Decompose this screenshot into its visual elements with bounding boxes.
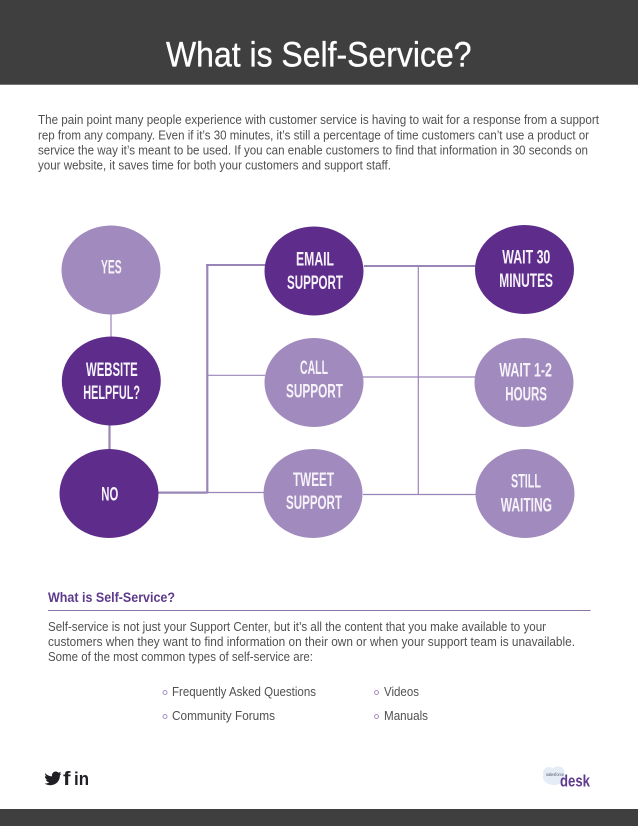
logo: salesforce desk: desk: [560, 772, 590, 790]
icon: facebook f: f: [63, 769, 71, 790]
intro paragraph: your website, it saves time for both your customers and support staff.: [38, 158, 391, 172]
footer bar: [0, 809, 638, 826]
node: website helpful: HELPFUL?: [83, 383, 140, 404]
node: yes: [62, 226, 160, 314]
node: email support: SUPPORT: [287, 273, 343, 294]
list: self-service types: Frequently Asked Questions: [172, 685, 316, 699]
title: What is Self-Service?: [166, 36, 472, 75]
logo: salesforce desk: [543, 766, 590, 790]
logo: salesforce desk: salesforce: [546, 772, 564, 777]
section paragraph: Self-service is not just your Support Center, but it’s all the content that you make available to your: [48, 620, 546, 634]
node: wait 30 minutes: WAIT 30: [502, 248, 550, 268]
node: wait 1-2 hours: HOURS: [505, 384, 547, 406]
node: tweet support: [264, 449, 362, 538]
node: call support: [264, 338, 364, 427]
node: website helpful: [62, 336, 161, 426]
node: wait 1-2 hours: WAIT 1-2: [499, 360, 552, 382]
node: wait 30 minutes: [475, 225, 574, 314]
intro paragraph: service the way it’s meant to be used. If you can enable customers to find that information in 30 seconds on: [38, 144, 588, 158]
node: no: [60, 449, 158, 538]
connector lines: [110, 264, 476, 494]
list: self-service types: [163, 685, 428, 723]
intro paragraph: [38, 113, 599, 172]
section heading: What is Self-Service?: [48, 589, 175, 605]
node: still waiting: [476, 449, 574, 538]
node: website helpful: WEBSITE: [86, 360, 138, 381]
icon: linkedin: in: [74, 769, 89, 789]
icon: cloud: [543, 766, 565, 785]
list: self-service types: Videos: [384, 685, 419, 699]
section paragraph: customers when they want to find information on their own or when your support team is unavailable.: [48, 635, 575, 649]
node: call support: SUPPORT: [286, 382, 343, 402]
node: yes: YES: [101, 258, 122, 278]
icon: twitter bird: [45, 772, 62, 785]
node: wait 30 minutes: MINUTES: [499, 271, 553, 292]
section paragraph: Some of the most common types of self-service are:: [48, 650, 313, 664]
node: call support: CALL: [300, 358, 328, 379]
flowchart: [60, 225, 574, 538]
node: still waiting: WAITING: [501, 496, 552, 516]
node: no: NO: [101, 484, 118, 506]
intro paragraph: rep from any company. Even if it’s 30 minutes, it’s still a percentage of time customers can’t use a product or: [38, 128, 589, 142]
node: email support: [264, 226, 364, 316]
social icons: [45, 769, 89, 790]
node: tweet support: SUPPORT: [286, 493, 342, 514]
node: email support: EMAIL: [296, 250, 334, 270]
intro paragraph: The pain point many people experience with customer service is having to wait for a response from a support: [38, 113, 599, 127]
header banner: [0, 0, 638, 85]
list: self-service types: Community Forums: [172, 709, 275, 723]
section paragraph: [48, 620, 575, 664]
node: still waiting: STILL: [511, 472, 541, 492]
list: self-service types: Manuals: [384, 709, 428, 723]
node: tweet support: TWEET: [293, 470, 334, 491]
node: wait 1-2 hours: [474, 338, 574, 427]
section: what is self-service: [48, 589, 590, 723]
